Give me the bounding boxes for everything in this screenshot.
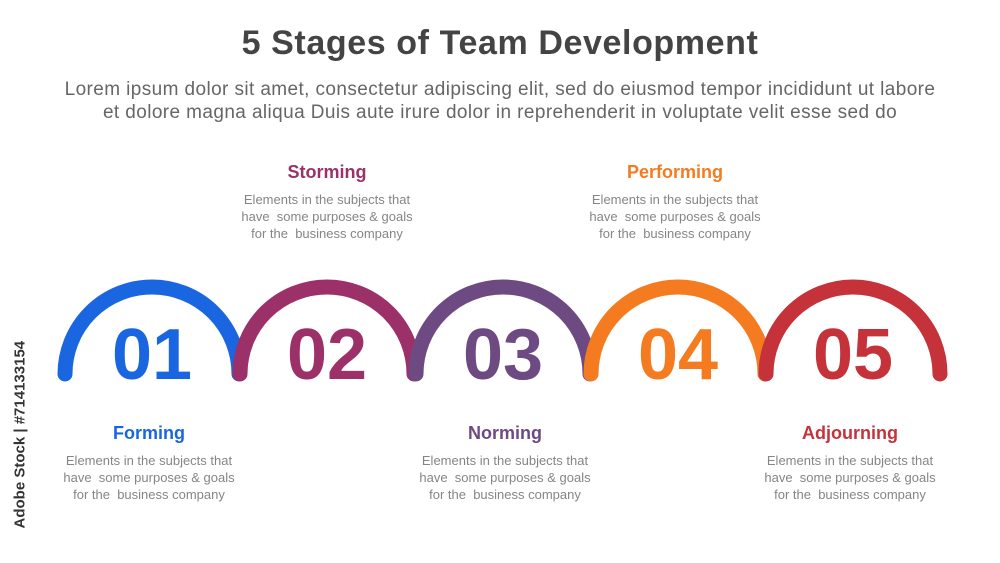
text: adjourning: Elements in the subjects that	[767, 453, 933, 468]
text: norming: for the business company	[429, 487, 581, 502]
text: performing: have some purposes & goals	[589, 209, 761, 224]
subtitle	[65, 79, 935, 123]
text: storming: Elements in the subjects that	[244, 192, 410, 207]
number 05: 05	[813, 315, 893, 395]
title: 5 Stages of Team Development	[242, 24, 758, 62]
text: adjourning: Adjourning	[802, 423, 898, 443]
subtitle: Lorem ipsum dolor sit amet, consectetur adipiscing elit, sed do eiusmod tempor incididunt ut labore	[65, 79, 935, 100]
number 01: 01	[112, 315, 192, 395]
arc 3	[416, 287, 590, 374]
text: storming: have some purposes & goals	[241, 209, 413, 224]
text: performing	[589, 162, 761, 241]
text: adjourning: for the business company	[774, 487, 926, 502]
text: norming: Norming	[468, 423, 542, 443]
number 03: 03	[463, 315, 543, 395]
arc 5	[766, 287, 940, 374]
text: storming: Storming	[288, 162, 366, 182]
text: forming: have some purposes & goals	[63, 470, 235, 485]
number 02: 02	[287, 315, 367, 395]
subtitle: et dolore magna aliqua Duis aute irure dolor in reprehenderit in voluptate velit esse sed do	[103, 102, 897, 123]
text: norming: have some purposes & goals	[419, 470, 591, 485]
arc 1	[65, 287, 239, 374]
text: norming: Elements in the subjects that	[422, 453, 588, 468]
arc 4	[591, 287, 765, 374]
side watermark: Adobe Stock | #714133154	[12, 341, 28, 528]
number 04: 04	[638, 315, 718, 395]
text: storming	[241, 162, 413, 241]
text: norming	[419, 423, 591, 502]
text: forming	[63, 423, 235, 502]
text: performing: Elements in the subjects that	[592, 192, 758, 207]
text: performing: for the business company	[599, 226, 751, 241]
text: forming: Forming	[113, 423, 185, 443]
text: forming: Elements in the subjects that	[66, 453, 232, 468]
arc 2	[240, 287, 414, 374]
text: storming: for the business company	[251, 226, 403, 241]
text: adjourning: have some purposes & goals	[764, 470, 936, 485]
text: adjourning	[764, 423, 936, 502]
text: forming: for the business company	[73, 487, 225, 502]
text: performing: Performing	[627, 162, 723, 182]
